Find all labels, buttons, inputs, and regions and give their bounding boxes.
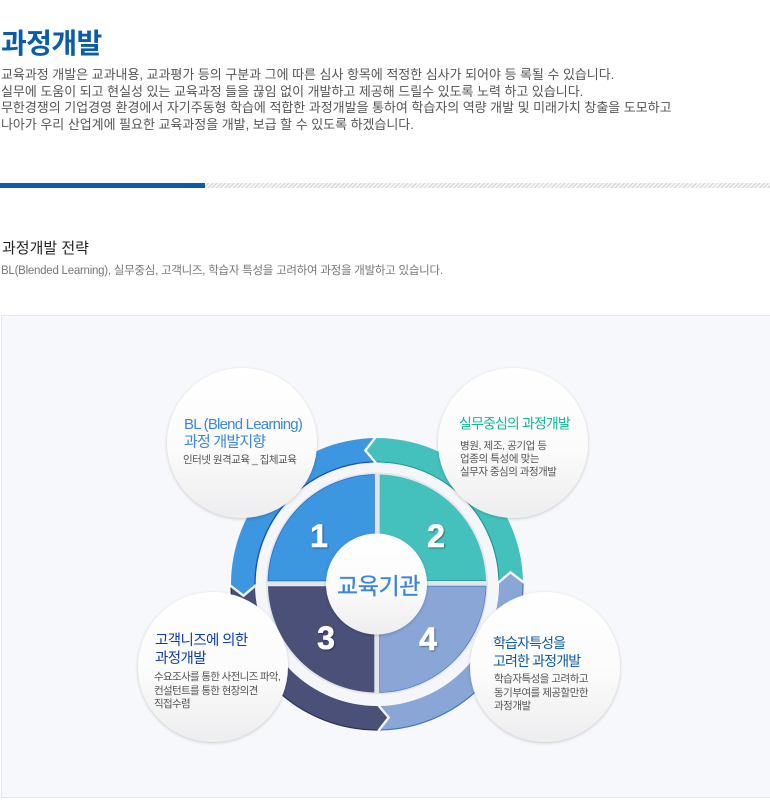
callout: BL: BL (Blend Learning) [184,416,303,433]
callout: learner traits [470,592,620,742]
callout: learner traits: 학습자특성을 [493,635,566,651]
callout: practice [438,368,588,518]
callout: practice: 업종의 특성에 맞는 [460,452,540,465]
quadrant numbers: 3 [317,620,335,656]
center circle [326,534,427,634]
quadrant 2 [380,474,486,581]
quadrant 1 [268,474,374,581]
callout: learner traits: 고려한 과정개발 [493,653,581,669]
callout: customer needs: 직접수렴 [154,697,190,710]
callout: BL [167,368,317,518]
callout: customer needs: 고객니즈에 의한 [155,632,248,649]
quadrant 3 [268,586,374,692]
callout: BL: 과정 개발지향 [184,434,266,450]
callout: learner traits: 학습자특성을 고려하고 [494,672,589,685]
intro paragraph: 교육과정 개발은 교과내용, 교과평가 등의 구분과 그에 따른 심사 항목에 적정한 심사가 되어야 등 록될 수 있습니다. [1,67,614,82]
quadrant numbers [310,518,445,657]
callout: BL: 인터넷 원격교육 _ 집체교육 [183,453,297,466]
ring segment: teal [365,438,523,583]
callout: customer needs [138,592,288,742]
callout: practice: 병원, 제조, 공기업 등 [460,439,547,452]
intro paragraph: 무한경쟁의 기업경영 환경에서 자기주동형 학습에 적합한 과정개발을 통하여 학습자의 역량 개발 및 미래가치 창출을 도모하고 [1,100,672,115]
quadrant numbers: 2 [427,518,445,554]
ring chevrons [230,437,524,731]
divider bar [0,183,770,188]
ring segment: blue [231,438,376,596]
intro paragraph: 실무에 도움이 되고 현실성 있는 교육과정 들을 끊임 없이 개발하고 제공해 드릴수 있도록 노력 하고 있습니다. [1,84,583,99]
center circle: 교육기관 [337,573,420,599]
intro paragraph: 나아가 우리 산업계에 필요한 교육과정을 개발, 보급 할 수 있도록 하겠습니다. [1,117,414,132]
quadrant numbers: 4 [419,621,437,657]
callout: practice: 실무중심의 과정개발 [459,416,571,432]
callout: customer needs: 컨설턴트를 통한 현장의견 [154,685,258,697]
inner quadrant disc [256,462,498,704]
outer cycle ring [230,437,524,731]
callout: learner traits: 동기부여를 제공할만한 [494,687,589,699]
intro paragraph [1,67,672,132]
callout: customer needs: 수요조사를 통한 사전니즈 파악, [154,671,280,683]
callout: customer needs: 과정개발 [155,650,206,667]
quadrant numbers: 1 [310,518,328,554]
section heading: 과정개발 전략 [2,240,89,257]
callout: learner traits: 과정개발 [494,700,531,712]
section description: BL(Blended Learning), 실무중심, 고객니즈, 학습자 특성을 고려하여 과정을 개발하고 있습니다. [1,265,443,277]
panel: strategy diagram [1,315,770,798]
ring segment: navy [231,585,389,730]
title: 과정개발 [1,28,102,59]
quadrant 4 [380,586,486,692]
ring segment: periwinkle [378,572,523,730]
callout: practice: 실무자 중심의 과정개발 [460,466,557,478]
